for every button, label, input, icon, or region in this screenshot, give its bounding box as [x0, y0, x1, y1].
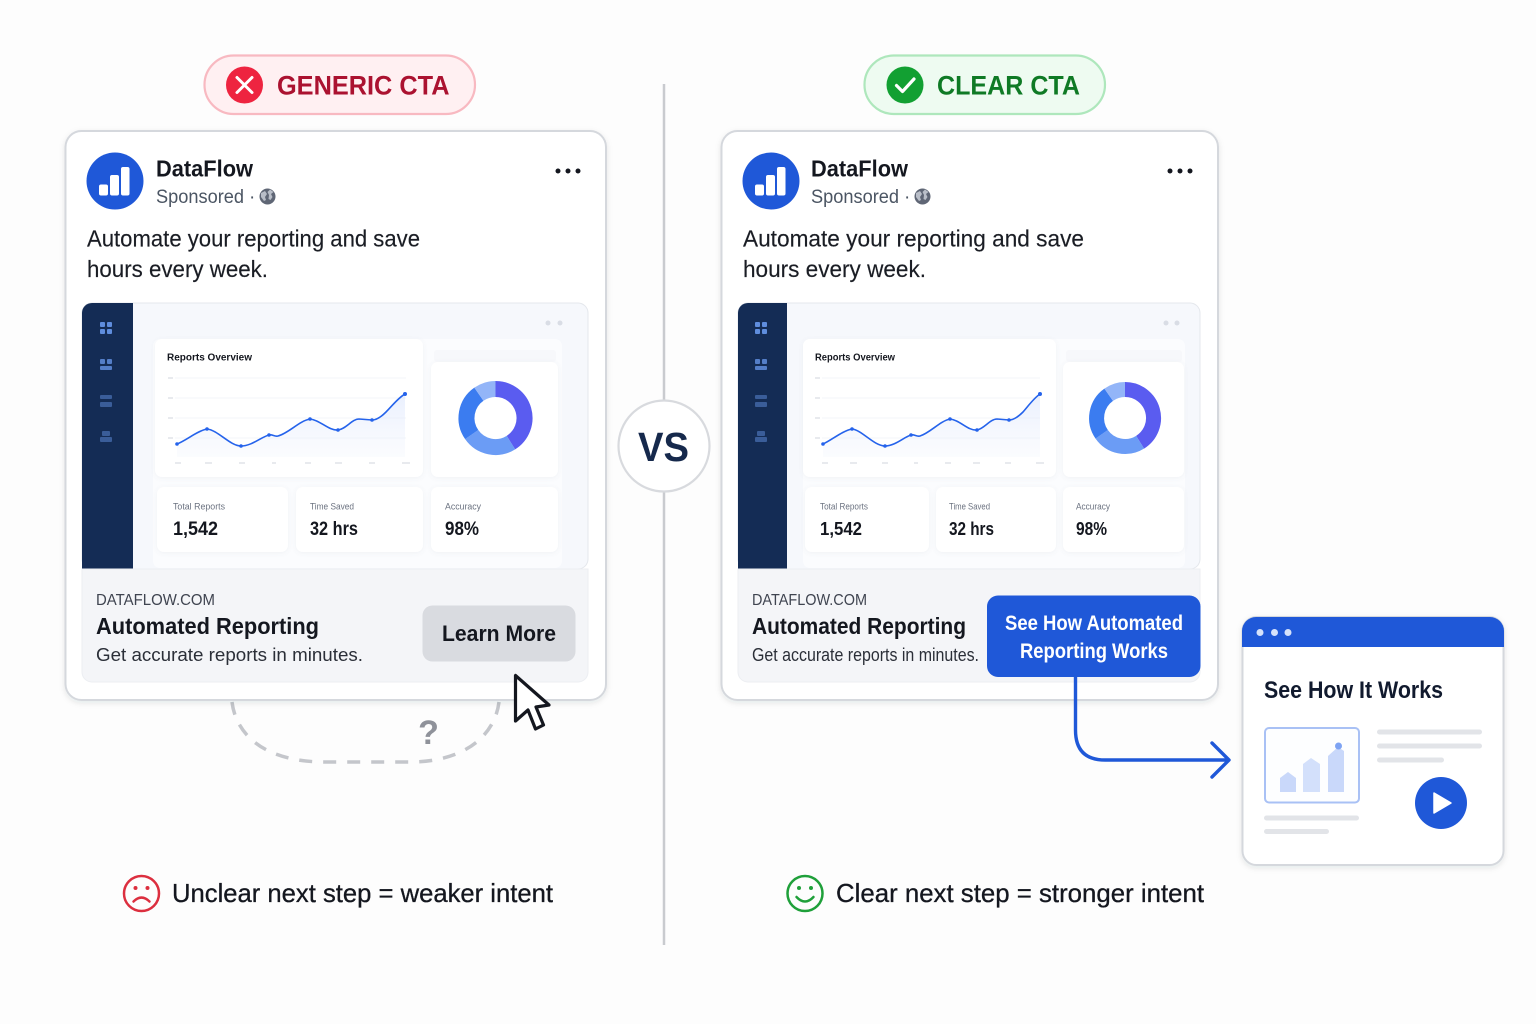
- takeaway text: Clear next step = stronger intent: [836, 878, 1205, 908]
- stat: accuracy: [431, 487, 558, 552]
- brand name: DataFlow: [156, 156, 253, 182]
- stat: total reports: Total Reports: [173, 502, 225, 512]
- donut chart card: [431, 362, 558, 477]
- takeaway text: Unclear next step = weaker intent: [172, 878, 554, 908]
- icon: play button: [1415, 777, 1467, 829]
- mini bar chart: [1265, 728, 1359, 802]
- ad footer bar: DATAFLOW.COM: [96, 592, 215, 609]
- badge label: clear: CLEAR CTA: [937, 70, 1080, 100]
- VS badge: VS: [638, 424, 689, 470]
- dashboard preview: [82, 303, 588, 569]
- center divider line: [663, 84, 665, 945]
- line chart card: Reports Overview: [815, 352, 896, 364]
- more menu dots: [556, 168, 580, 174]
- button: see how automated reporting works: Reporting Works: [1020, 640, 1168, 663]
- stat: total reports: 1,542: [820, 518, 862, 539]
- stat: time saved: Time Saved: [310, 502, 354, 512]
- stat: accuracy: Accuracy: [1076, 502, 1110, 512]
- brand name: DataFlow: [811, 156, 908, 182]
- line chart card: [803, 339, 1056, 477]
- ad footer bar: Get accurate reports in minutes.: [752, 645, 979, 665]
- stat: total reports: Total Reports: [820, 502, 868, 512]
- question mark: ?: [418, 714, 439, 752]
- donut chart card: [1063, 362, 1184, 477]
- ad copy: [743, 226, 1084, 282]
- ad copy: hours every week.: [87, 256, 268, 282]
- sponsored line: ·: [904, 187, 910, 208]
- stat: accuracy: Accuracy: [445, 502, 481, 512]
- stat: time saved: [936, 487, 1056, 552]
- ad copy: hours every week.: [743, 256, 926, 282]
- icon: sad face: [124, 876, 159, 911]
- ad copy: [87, 226, 420, 282]
- icon: globe: [914, 188, 930, 204]
- icon: happy face: [788, 876, 822, 911]
- sidebar icons: [755, 322, 767, 442]
- ad copy: Automate your reporting and save: [743, 226, 1084, 252]
- more menu dots: [1168, 168, 1192, 174]
- stat: total reports: [805, 487, 929, 552]
- stat: total reports: 1,542: [173, 519, 218, 540]
- ad footer bar: DATAFLOW.COM: [752, 592, 867, 609]
- badge label: generic: GENERIC CTA: [277, 70, 450, 100]
- dashed path under generic card: [232, 702, 499, 762]
- icon: mouse cursor: [516, 676, 549, 729]
- stat: accuracy: 98%: [1076, 518, 1107, 539]
- stat: time saved: 32 hrs: [310, 519, 358, 540]
- VS badge: [618, 400, 710, 492]
- badge: clear CTA: [864, 56, 1105, 114]
- button: learn more: Learn More: [442, 621, 556, 646]
- takeaway: unclear next step: [124, 876, 554, 911]
- line chart card: [155, 339, 423, 477]
- panel: clear ad card: [722, 131, 1218, 700]
- line chart card: Reports Overview: [167, 352, 253, 364]
- stat: total reports: [157, 487, 288, 552]
- ad footer bar: Automated Reporting: [752, 613, 966, 639]
- stat: time saved: [296, 487, 423, 552]
- button: learn more: [422, 606, 576, 662]
- brand logo: [86, 152, 144, 210]
- icon: green check: [886, 66, 924, 104]
- landing page title: See How It Works: [1264, 677, 1443, 704]
- panel: generic ad card: [66, 131, 606, 700]
- sponsored line: ·: [249, 187, 255, 208]
- sponsored line: Sponsored: [811, 187, 899, 208]
- stat: accuracy: [1063, 487, 1184, 552]
- sponsored line: Sponsored: [156, 187, 244, 208]
- takeaway: clear next step: [788, 876, 1205, 911]
- ad footer bar: Automated Reporting: [96, 613, 319, 639]
- stat: accuracy: 98%: [445, 519, 479, 540]
- brand logo: [742, 152, 800, 210]
- button: see how automated reporting works: See How Automated: [1005, 612, 1183, 635]
- stat: time saved: 32 hrs: [949, 518, 994, 539]
- ad footer bar: Get accurate reports in minutes.: [96, 644, 363, 665]
- ad copy: Automate your reporting and save: [87, 226, 420, 252]
- stat: time saved: Time Saved: [949, 502, 990, 512]
- button: see how automated reporting works: [987, 596, 1200, 677]
- sidebar icons: [100, 322, 112, 442]
- icon: red cross: [226, 66, 263, 104]
- ad footer bar: [738, 569, 1200, 682]
- icon: globe: [260, 188, 276, 204]
- badge: generic CTA: [204, 56, 475, 114]
- dashboard preview: [738, 303, 1200, 569]
- ad footer bar: [82, 569, 588, 682]
- panel: landing page preview: [1242, 617, 1504, 865]
- placeholder text lines: [1264, 730, 1482, 834]
- browser header: [1242, 617, 1504, 647]
- arrow to landing page: [1076, 677, 1229, 777]
